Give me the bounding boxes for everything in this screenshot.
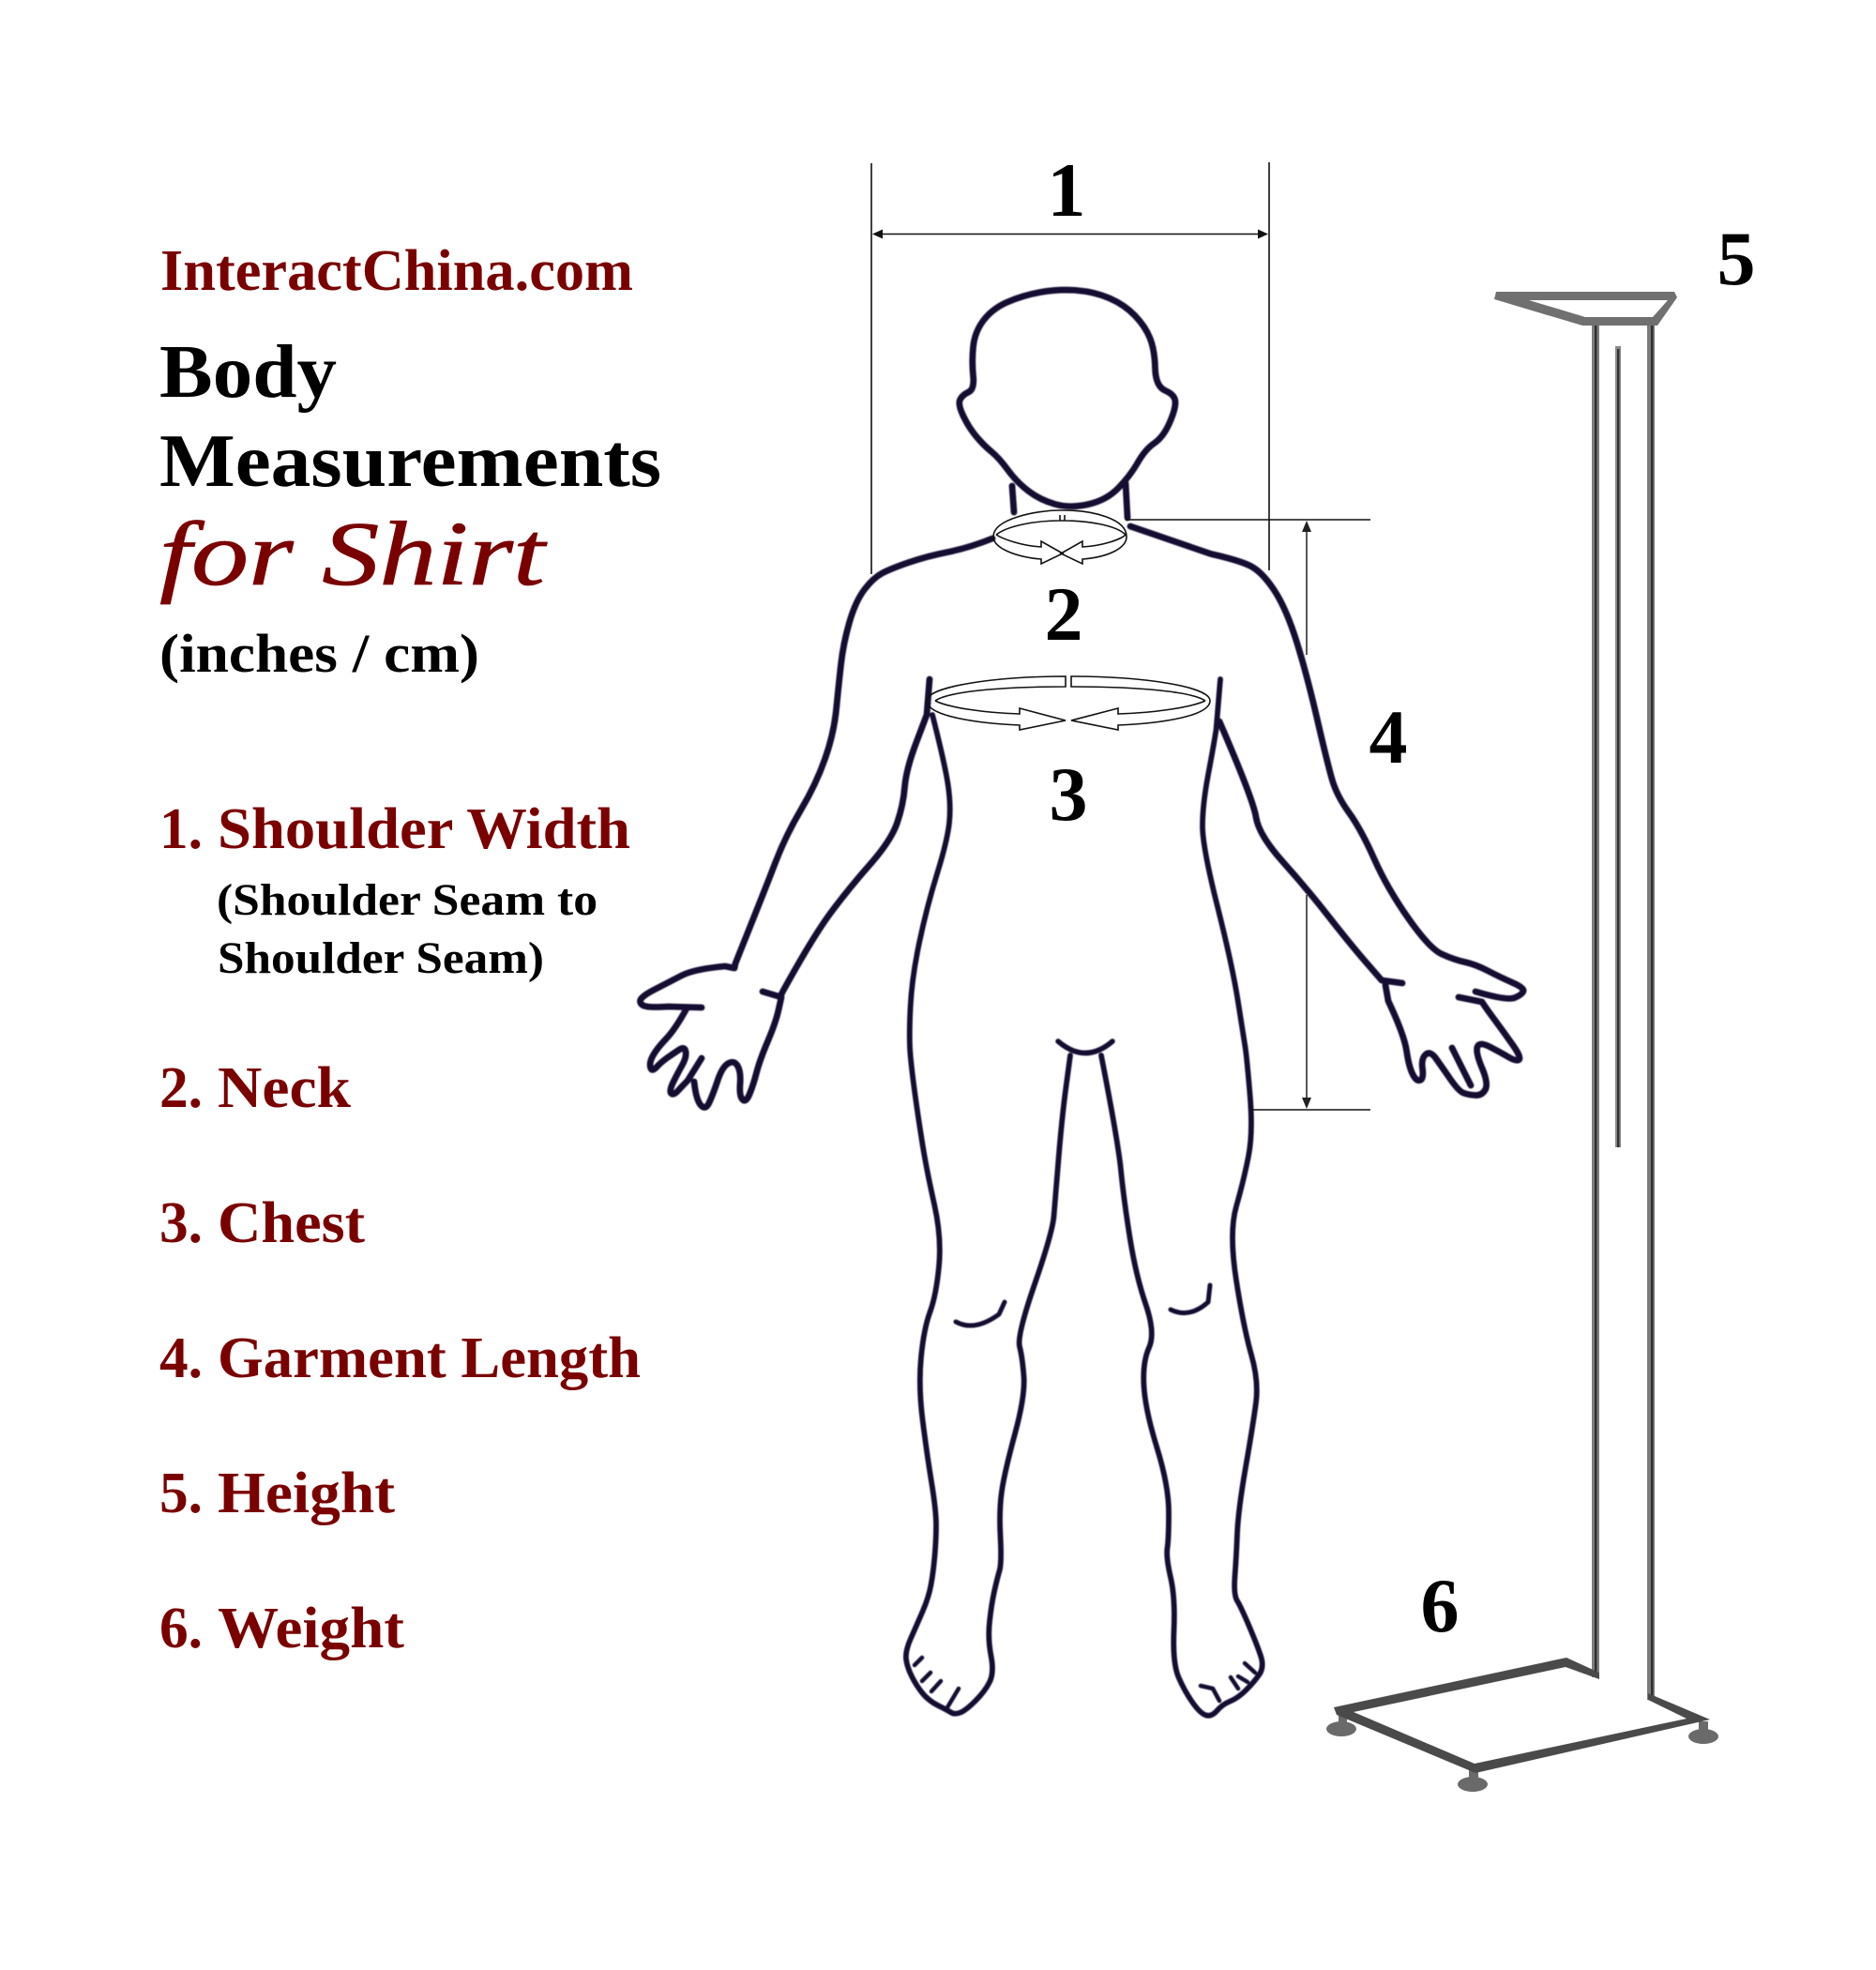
heading: Body: Body [159, 331, 337, 414]
item 3 [159, 1191, 365, 1255]
pole left [1592, 326, 1599, 1677]
item 4: 4. [159, 1326, 203, 1390]
item 5: 5. [159, 1462, 203, 1525]
numbers on diagram [1045, 147, 1756, 1648]
left toes [915, 1658, 959, 1707]
garment length dimension [1126, 520, 1370, 1110]
item 3: 3. [159, 1191, 203, 1255]
knee marks [956, 1285, 1210, 1326]
item 1: 1. [159, 797, 203, 861]
chest loop arrows [927, 676, 1210, 730]
item 2 [159, 1056, 352, 1120]
site name: InteractChina.com [160, 239, 633, 303]
item 1 note: Shoulder Seam) [218, 933, 544, 983]
units note: (inches / cm) [159, 623, 479, 684]
measuring head [1494, 292, 1677, 326]
shoulder width dimension [871, 162, 1269, 574]
measurement list [159, 797, 641, 1660]
double arrow [872, 229, 1268, 238]
right toes [1201, 1663, 1255, 1701]
torso and left leg [906, 715, 1070, 1714]
body outline figure [640, 290, 1523, 1716]
item 6: 6. [159, 1597, 203, 1660]
right arm and hand [1130, 526, 1523, 1096]
number 5: 5 [1717, 216, 1756, 301]
feet [1326, 1715, 1718, 1792]
number 2: 2 [1045, 571, 1082, 657]
number 4: 4 [1369, 694, 1407, 780]
right leg and torso [1101, 679, 1263, 1716]
item 3: Chest [218, 1191, 365, 1255]
item 2: Neck [218, 1056, 352, 1120]
item 4: Garment Length [218, 1326, 641, 1390]
number 3: 3 [1049, 751, 1088, 837]
crotch [1058, 1041, 1112, 1053]
item 1: Shoulder Width [218, 797, 630, 861]
item 2: 2. [159, 1056, 203, 1120]
height and weight scale [1326, 292, 1718, 1792]
item 1 note [217, 875, 598, 983]
item 6: Weight [218, 1597, 404, 1660]
pole right [1647, 326, 1655, 1700]
head [960, 290, 1175, 507]
vertical arrow [1302, 521, 1311, 1109]
extension lines [871, 162, 1269, 574]
neck loop arrows [993, 510, 1127, 564]
heading: Measurements: Measurements [159, 420, 661, 503]
neck [1012, 483, 1127, 518]
platform base [1334, 1658, 1710, 1773]
item 5: Height [218, 1462, 395, 1525]
number 6: 6 [1420, 1563, 1460, 1648]
number 1: 1 [1047, 147, 1086, 233]
handwritten subheading: for Shirt [159, 504, 548, 605]
title block [159, 239, 661, 684]
left arm and hand [640, 538, 992, 1107]
centre scale [1615, 346, 1621, 1147]
item 1 note: (Shoulder Seam to [217, 875, 598, 925]
extension lines [1126, 520, 1370, 1110]
